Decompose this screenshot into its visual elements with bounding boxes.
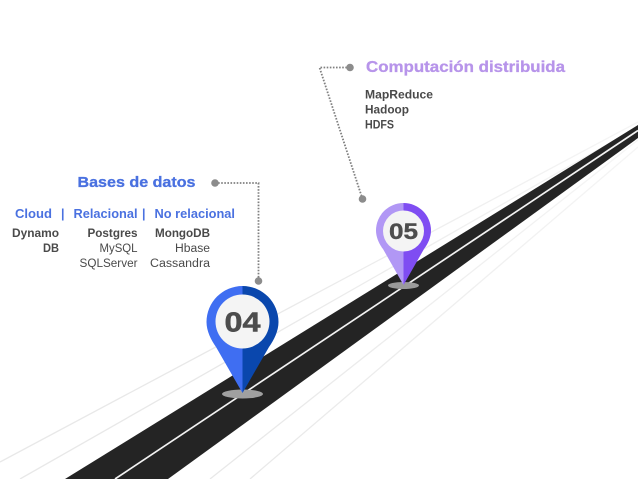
column headings: Relacional <box>74 207 138 221</box>
database list: No relacional: Cassandra <box>150 258 211 270</box>
database list: Relacional: SQLServer <box>80 258 138 270</box>
database list: Relacional <box>80 228 138 270</box>
database list: Cloud: Dynamo <box>12 228 59 240</box>
column headings: | <box>61 207 64 221</box>
heading: Bases de datos: Bases de datos <box>78 174 196 191</box>
connector: Bases de datos to pin 04 <box>211 179 262 285</box>
column headings <box>15 207 235 221</box>
database list: No relacional: MongoDB <box>155 228 210 240</box>
list: distributed computing tools: MapReduce <box>365 90 433 102</box>
pin 04 <box>206 286 278 398</box>
database list: Cloud: DB <box>43 243 59 255</box>
column headings: | <box>142 207 146 221</box>
list: distributed computing tools: HDFS <box>365 120 394 132</box>
database list: Cloud <box>12 228 59 255</box>
heading: Computación distribuida: Computación distribuida <box>366 59 565 76</box>
database list: Relacional: Postgres <box>88 228 138 240</box>
pin 05: 05 <box>389 219 418 244</box>
list: distributed computing tools: Hadoop <box>365 104 409 116</box>
connector: Computación distribuida to pin 05 <box>320 64 366 203</box>
road <box>65 125 638 479</box>
column headings: Cloud <box>15 207 52 221</box>
list: distributed computing tools <box>365 90 433 132</box>
database list: No relacional <box>150 228 211 270</box>
database list: No relacional: Hbase <box>175 243 210 255</box>
pin 04: 04 <box>224 306 261 338</box>
column headings: No relacional <box>154 207 235 221</box>
pin 05 <box>376 203 431 289</box>
database list: Relacional: MySQL <box>100 243 138 255</box>
